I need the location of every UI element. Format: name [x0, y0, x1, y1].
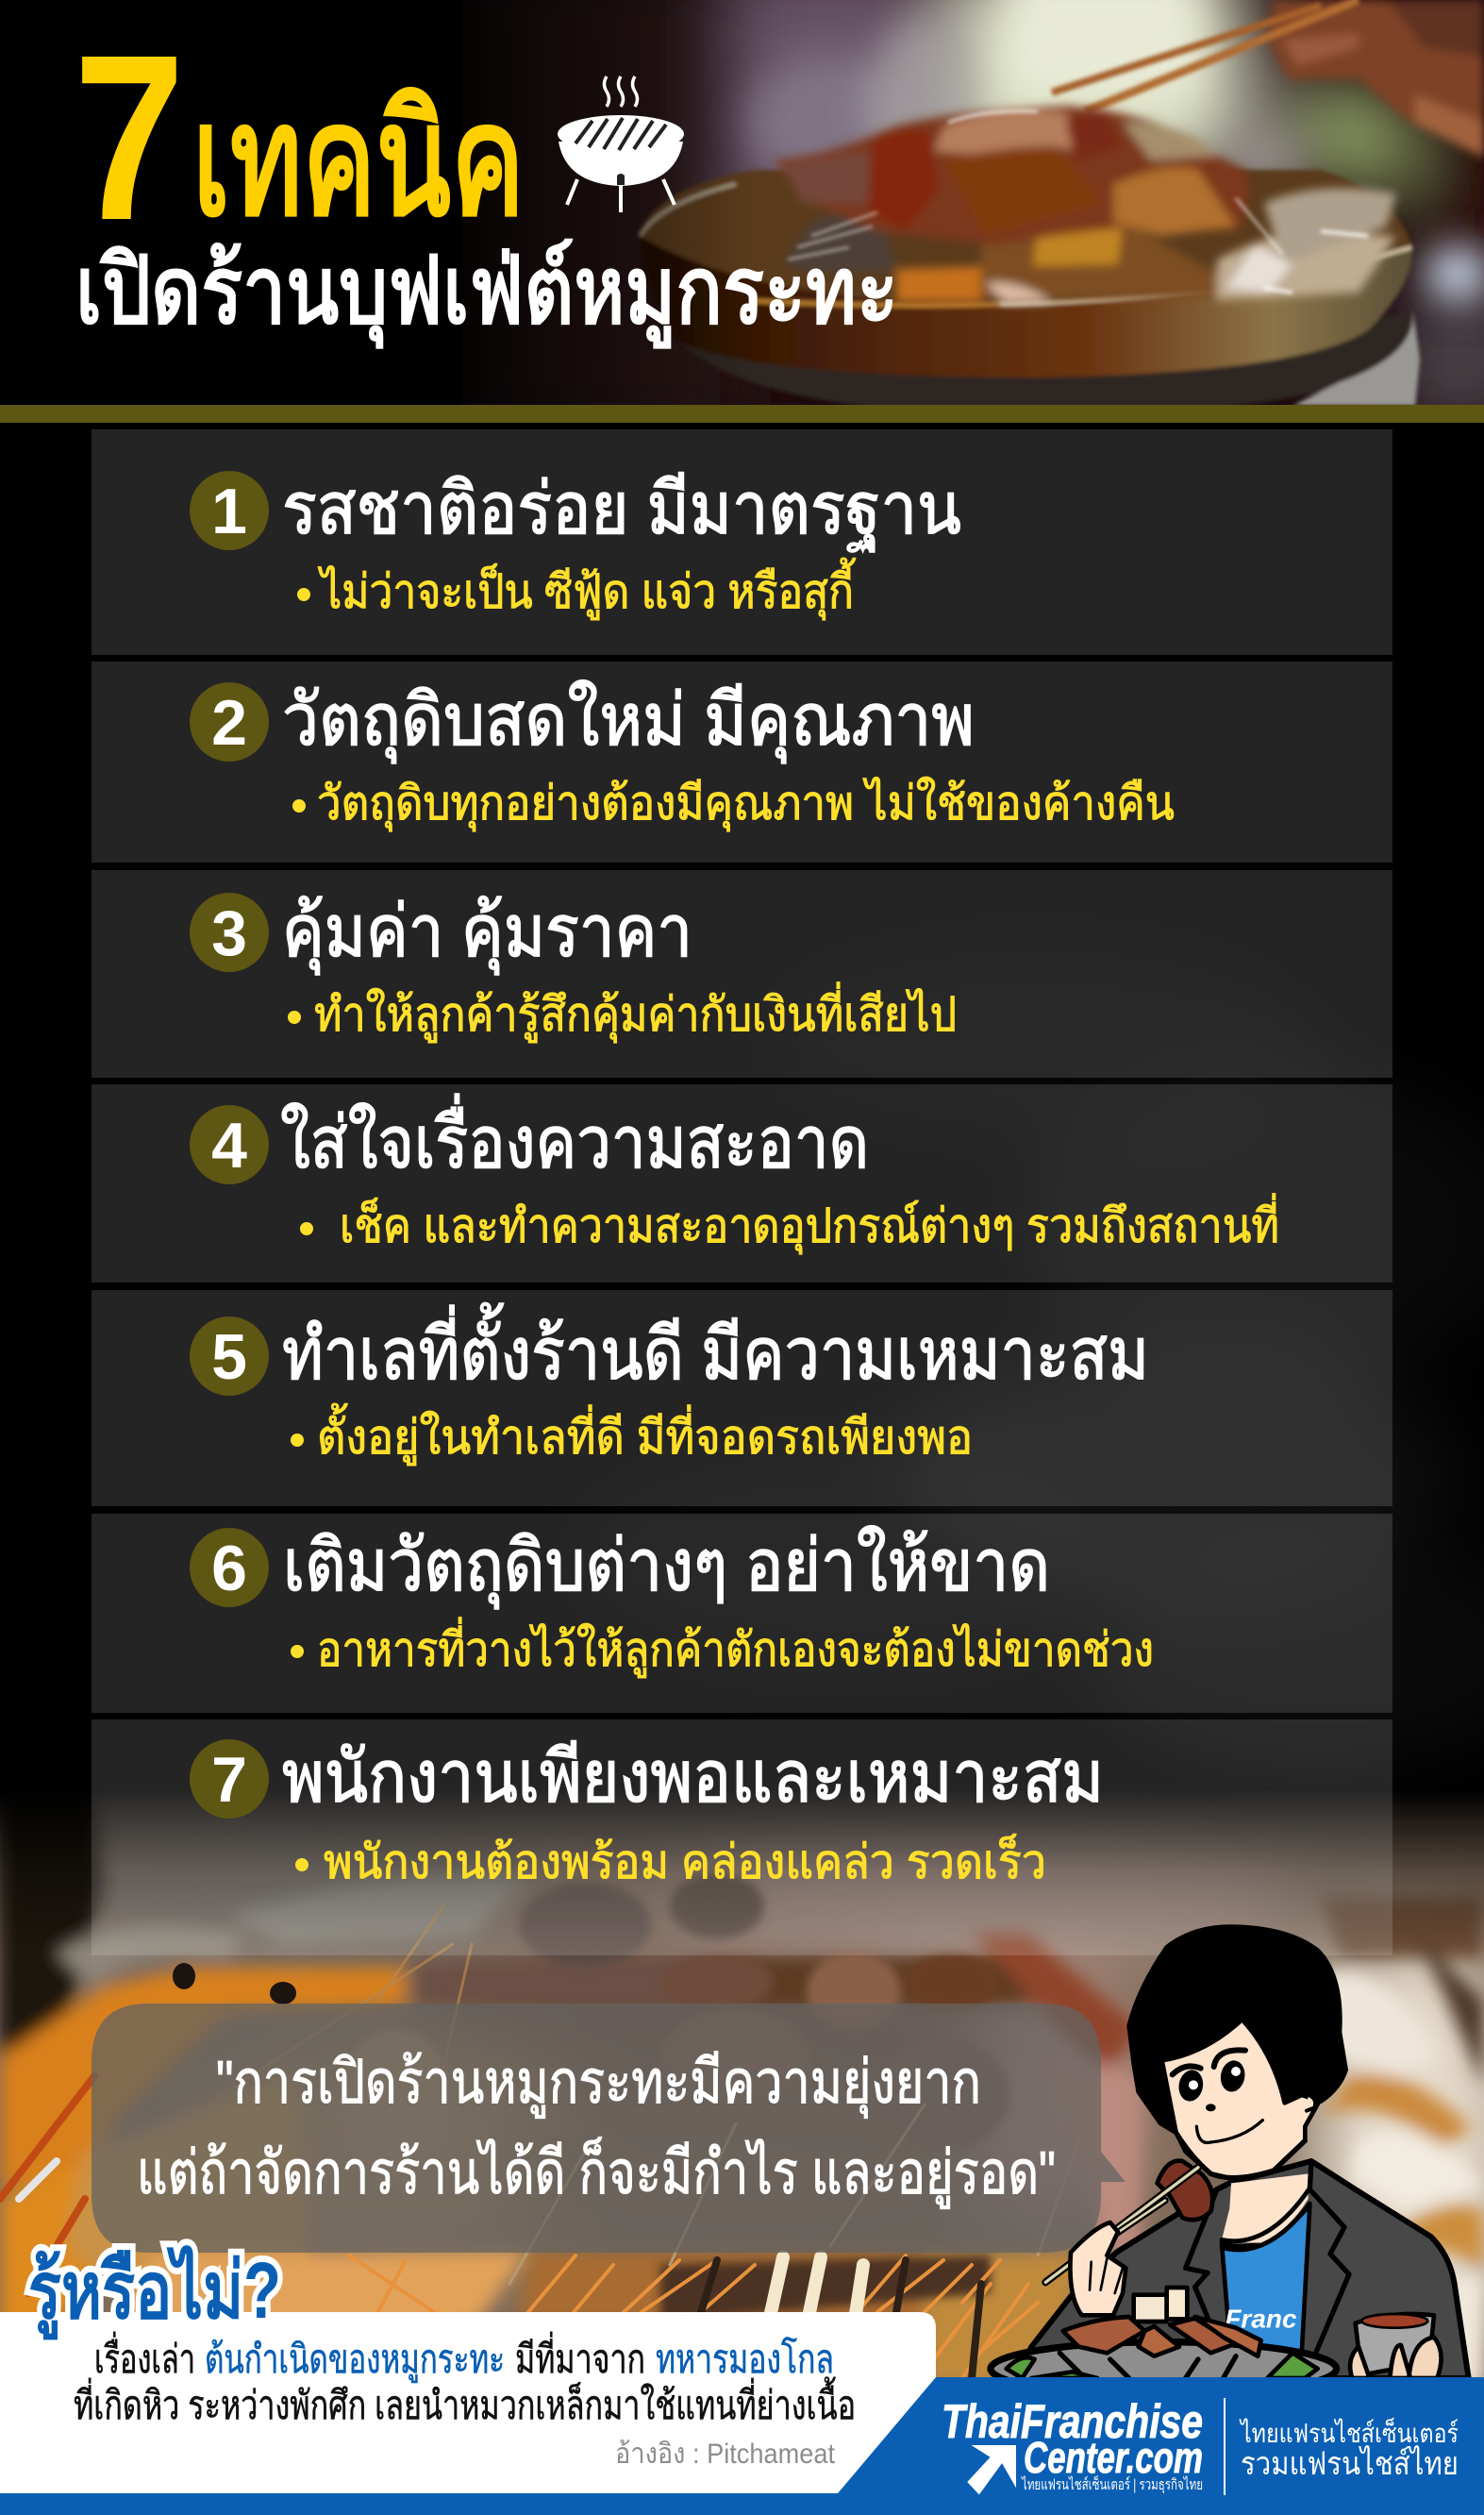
panel 2: วัตถุดิบทุกอย่างต้องมีคุณภาพ ไม่ใช้ของค้างคืน	[317, 777, 1175, 831]
black left side fade	[462, 0, 732, 405]
meatballs	[340, 1873, 1009, 2322]
panel 1: 1	[211, 476, 247, 547]
panel 6: อาหารที่วางไว้ให้ลูกค้าตักเองจะต้องไม่ขาดช่วง	[317, 1618, 1154, 1678]
bottom food photo: shrimp and meatballs	[0, 1755, 1484, 2388]
panel 6: 6	[211, 1533, 247, 1604]
panel 5: 5	[211, 1321, 247, 1393]
panel 7: พนักงานเพียงพอและเหมาะสม	[282, 1737, 1104, 1818]
panel 4: เช็ค และทำความสะอาดอุปกรณ์ต่างๆ รวมถึงสถานที่	[340, 1194, 1279, 1254]
title	[74, 6, 898, 349]
panel 7: 7	[211, 1744, 247, 1816]
speech bubble with quote: แต่ถ้าจัดการร้านได้ดี ก็จะมีกำไร และอยู่รอด"	[137, 2138, 1056, 2209]
title: 7	[74, 6, 185, 269]
did you know card: อ้างอิง : Pitchameat	[615, 2439, 836, 2470]
did you know card: ทหารมองโกล	[656, 2336, 834, 2381]
panel 3: 3	[211, 897, 247, 969]
panel 7: พนักงานต้องพร้อม คล่องแคล่ว รวดเร็ว	[324, 1834, 1046, 1888]
did you know card: เรื่องเล่า	[94, 2332, 195, 2381]
icon: barbecue grill	[558, 76, 684, 212]
icon: arrow	[966, 2444, 1017, 2496]
speech bubble with quote: "การเปิดร้านหมูกระทะมีความยุ่งยาก	[216, 2048, 981, 2119]
shrimp antennae	[0, 1906, 1085, 2378]
speech bubble with quote	[92, 2004, 1126, 2253]
title: เทคนิค	[192, 74, 525, 247]
panel 1: ไม่ว่าจะเป็น ซีฟู้ด แจ่ว หรือสุกี้	[317, 558, 856, 620]
title: เปิดร้านบุฟเฟ่ต์หมูกระทะ	[75, 238, 898, 349]
panel 6	[92, 1514, 1392, 1713]
panel 6: เติมวัตถุดิบต่างๆ อย่าให้ขาด	[283, 1525, 1050, 1609]
cup of sauce	[1350, 2314, 1442, 2378]
band under header	[0, 405, 1484, 423]
panel 2: 2	[211, 687, 247, 759]
panel 5: ตั้งอยู่ในทำเลที่ดี มีที่จอดรถเพียงพอ	[317, 1403, 973, 1466]
chopsticks and meat	[1045, 2161, 1212, 2282]
logo: ThaiFranchise Center: Center.com	[1024, 2433, 1203, 2482]
hand	[1070, 2222, 1126, 2315]
panel 2	[92, 662, 1392, 863]
panel 2: วัตถุดิบสดใหม่ มีคุณภาพ	[282, 679, 975, 763]
did you know card: ต้นกำเนิดของหมูกระทะ	[205, 2337, 505, 2383]
tagline	[1239, 2417, 1459, 2482]
header photo: grilled pork on hot pan	[474, 0, 1484, 405]
pan	[640, 170, 1420, 415]
panel 5	[92, 1290, 1392, 1506]
panel 3: ทำให้ลูกค้ารู้สึกคุ้มค่ากับเงินที่เสียไป	[314, 982, 957, 1043]
panel 1	[92, 429, 1392, 655]
logo: ThaiFranchise Center: ThaiFranchise	[942, 2395, 1203, 2448]
did you know card: รู้หรือไม่?	[28, 2245, 281, 2340]
icon: hand holding chopsticks	[1052, 0, 1484, 159]
did you know card	[0, 2245, 936, 2493]
mascot: man eating with chopsticks: Franc	[1225, 2305, 1297, 2334]
footer: blue band	[0, 2377, 1484, 2515]
plate of meat and tofu	[991, 2288, 1337, 2395]
panel 5: ทำเลที่ตั้งร้านดี มีความเหมาะสม	[282, 1302, 1149, 1395]
panel 4: 4	[211, 1110, 247, 1182]
panel 3	[92, 870, 1392, 1078]
logo: ThaiFranchise Center: ไทยแฟรนไชส์เซ็นเตอร์ | รวมธุรกิจไทย	[1021, 2474, 1203, 2494]
did you know card: ที่เกิดหิว ระหว่างพักศึก เลยนำหมวกเหล็กมาใช้แทนที่ย่างเนื้อ	[74, 2376, 856, 2427]
meat and grill	[774, 106, 1396, 304]
panel 1: รสชาติอร่อย มีมาตรฐาน	[282, 469, 961, 552]
panel 4	[92, 1084, 1392, 1283]
panel 7	[92, 1719, 1392, 1955]
mascot: man eating with chopsticks	[991, 1927, 1469, 2395]
panel 3: คุ้มค่า คุ้มราคา	[282, 892, 692, 975]
panel 4: ใส่ใจเรื่องความสะอาด	[280, 1094, 869, 1183]
logo: ThaiFranchise Center	[942, 2395, 1203, 2496]
did you know card: มีที่มาจาก	[515, 2332, 645, 2381]
